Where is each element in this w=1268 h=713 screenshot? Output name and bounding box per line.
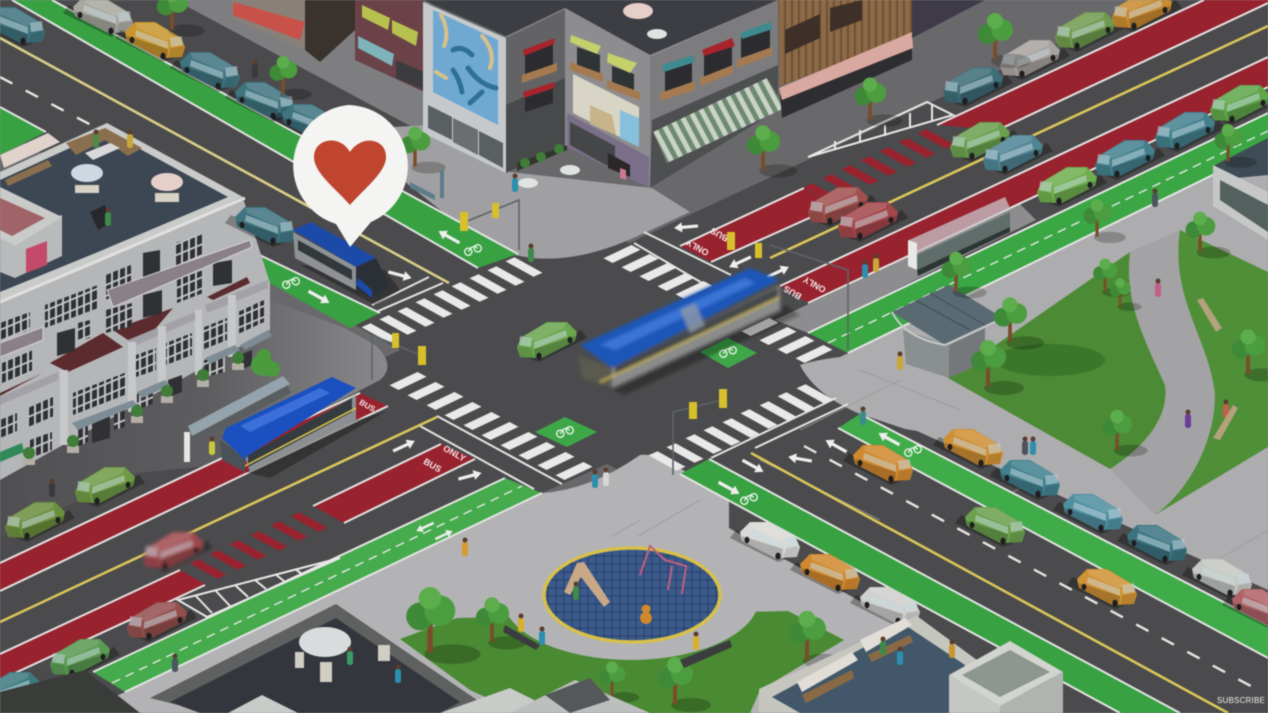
callout: heart speech bubble — [293, 105, 408, 247]
railing: mid balconies — [0, 280, 268, 405]
wall: blue mural — [423, 2, 506, 173]
watermark: subscribe: SUBSCRIBE — [1217, 696, 1265, 705]
street furniture: bike share station — [410, 170, 444, 200]
street furniture: benches — [503, 298, 1238, 668]
bike lane: far left fragment — [0, 107, 46, 155]
wall: purple band — [567, 113, 649, 188]
building: south small white roof — [228, 695, 298, 713]
umbrella: pink — [151, 173, 183, 191]
toy bear — [640, 604, 652, 624]
bus shelter: west — [184, 376, 291, 462]
doors — [57, 250, 252, 443]
bike lane: north-west lower — [243, 247, 380, 328]
sidewalk paving joints — [520, 370, 1268, 590]
building: south-west corner — [0, 670, 140, 713]
lane text: BUS ONLY east: BUS — [782, 284, 803, 302]
bike lane: south-east left — [680, 459, 1180, 713]
bus: articulated in motion — [578, 268, 800, 395]
bike lane: south-east right — [838, 414, 1268, 658]
bus lane: west stop box — [313, 444, 475, 523]
window: red awning — [700, 38, 735, 86]
sidewalk: north corner — [340, 125, 690, 259]
building: maroon shop — [355, 0, 424, 92]
icon: heart — [314, 141, 386, 205]
lawn: right — [1155, 230, 1268, 515]
bus lane: stop box north — [680, 188, 836, 262]
window: teal awning — [660, 55, 695, 101]
park: east lawn and curved path — [948, 230, 1268, 515]
window: lower red awning — [525, 85, 553, 112]
lane text: BUS ONLY east — [782, 274, 828, 302]
lane text: BUS ONLY west: ONLY — [441, 443, 467, 464]
wall — [0, 198, 270, 480]
lawn: pavilion shade — [995, 344, 1105, 376]
roof terrace: awning — [0, 133, 60, 168]
wall: ground floor windows — [428, 105, 452, 140]
bus lane: west lower — [0, 570, 205, 680]
crosswalks — [362, 245, 834, 480]
building: south-east roof — [759, 616, 1063, 713]
wall: grey face — [506, 9, 565, 173]
swings — [640, 546, 686, 594]
penthouse — [0, 187, 62, 278]
mural: blue painting — [433, 10, 498, 125]
bike lane: north-west upper — [12, 0, 518, 268]
railing: upper left balcony — [0, 327, 43, 357]
umbrella — [299, 627, 351, 657]
awning: striped — [653, 78, 785, 163]
slide — [564, 562, 610, 607]
planters — [23, 352, 244, 465]
umbrella: white — [71, 164, 103, 182]
penthouse: top — [949, 641, 1063, 706]
building: wood clad — [778, 0, 913, 118]
window grids — [0, 233, 264, 458]
building: central mural block — [423, 0, 785, 188]
tables — [75, 185, 99, 193]
lane text: BUS west upper: BUS — [358, 398, 377, 414]
bus: west stop — [220, 377, 385, 478]
crosswalk: south-west — [390, 372, 592, 480]
bus lane: east — [780, 57, 1268, 303]
crosswalk: south-east — [648, 384, 834, 471]
crosswalk: north-east — [604, 245, 832, 363]
roof edge — [506, 1, 778, 56]
benches — [802, 670, 854, 703]
lane text: BUS ONLY east: ONLY — [802, 274, 828, 295]
window: olive awning right — [607, 53, 640, 100]
window: teal awning right — [737, 22, 773, 68]
window: upper red awning — [525, 42, 553, 80]
building: red awning shop — [232, 0, 355, 62]
roof — [423, 0, 778, 57]
lane text: BUS ONLY north-east: ONLY — [685, 237, 711, 258]
building: south centre roof — [440, 678, 650, 713]
bike lane: east two-way — [808, 113, 1268, 353]
wall: inner mural face — [565, 9, 650, 188]
roof terrace: seating — [66, 128, 142, 156]
penthouse: walls — [949, 675, 1000, 713]
hatched wedge: east — [808, 102, 953, 157]
bike box: centre east — [700, 338, 757, 368]
playground: blue pad — [544, 546, 720, 642]
building: west mixed use — [0, 123, 272, 480]
building: transit pavilion — [892, 285, 1003, 378]
mural: cream — [573, 74, 639, 147]
bus lane: north-east upper — [937, 0, 1268, 130]
red stripes: east — [804, 129, 954, 203]
bike box: centre south — [535, 417, 597, 447]
sidewalk: south block — [80, 455, 1060, 713]
bus shelter: east — [908, 197, 1010, 276]
lawn: left — [948, 252, 1166, 469]
awnings — [797, 652, 858, 692]
wall: right face — [650, 0, 778, 188]
bus lane: west upper — [0, 393, 388, 591]
building: south-west rooftop — [150, 604, 480, 713]
park: south lawn — [400, 611, 844, 713]
window: olive awning left — [570, 35, 603, 82]
building: dark purple — [912, 0, 985, 38]
canopies — [0, 330, 272, 462]
street furniture: cafe tables — [518, 3, 667, 188]
lane text: BUS ONLY north-east: BUS — [709, 226, 730, 244]
recessed balcony floors — [0, 277, 250, 396]
sidewalk: east bus stop bulge — [775, 204, 1036, 333]
sidewalk: west corner — [0, 200, 387, 537]
sidewalk: east block — [800, 148, 1268, 590]
lane text: BUS ONLY west: BUS — [422, 456, 443, 474]
roof deck — [0, 131, 228, 292]
road markings: arrows and bike symbols — [282, 221, 922, 543]
traffic signals — [372, 200, 848, 475]
planter: foot of grey wall — [517, 145, 567, 171]
railing: upper balcony — [107, 240, 252, 307]
bike lane: west two-way — [93, 478, 542, 692]
path: curved walkway — [1110, 230, 1215, 515]
bus: small shuttle north-west — [293, 222, 400, 305]
pilasters — [60, 295, 236, 445]
roof parapet — [0, 123, 243, 302]
hatched wedge: west — [178, 558, 340, 617]
sidewalk: north-west strip — [175, 0, 449, 215]
shrub: by west corner — [251, 349, 280, 377]
grill — [90, 205, 112, 230]
door: dark with pink figure — [608, 153, 630, 177]
parapet lip — [0, 198, 245, 302]
red stripes: west — [170, 512, 328, 589]
plaza: circular paving — [503, 536, 759, 660]
buildings: north row — [232, 0, 985, 188]
building: north-east corner pavilion — [1213, 138, 1268, 240]
lane text: BUS ONLY west — [422, 443, 467, 474]
bubble — [293, 105, 408, 247]
crosswalk: west — [362, 257, 542, 343]
lane text: BUS ONLY north-east — [685, 226, 730, 258]
